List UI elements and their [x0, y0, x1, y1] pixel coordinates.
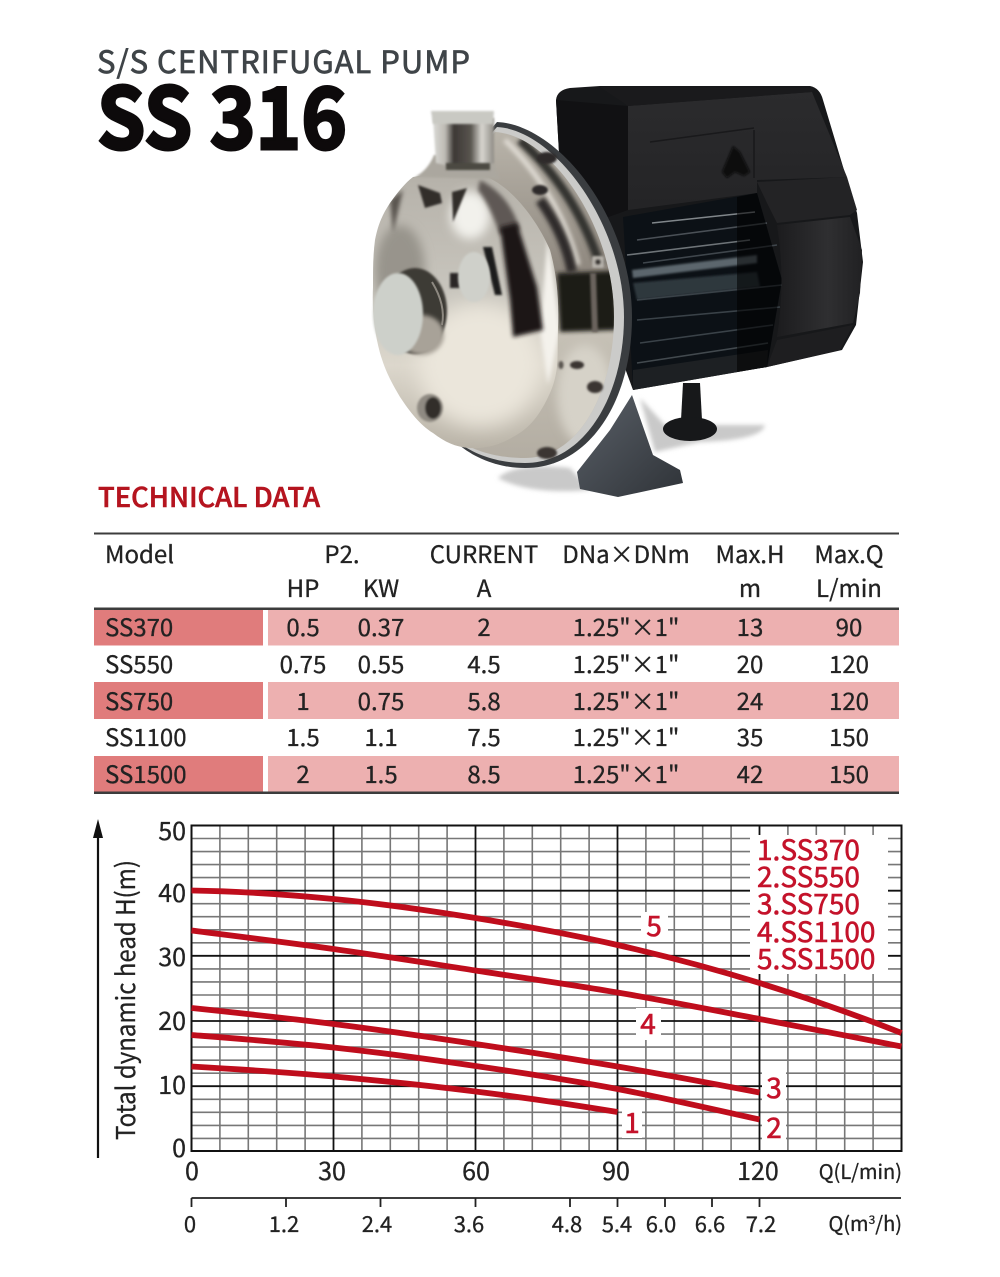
- flow axis L/min: 60: [462, 1152, 490, 1188]
- y-axis numbers: 50: [158, 812, 186, 848]
- flow axis L/min: 90: [602, 1152, 630, 1188]
- row SS1500: 1.5: [364, 755, 398, 790]
- row SS370: SS370: [105, 608, 173, 643]
- row SS370: 1.25"×1": [573, 608, 679, 643]
- y-axis arrow: [93, 819, 103, 1158]
- row SS1500: 1.25"×1": [573, 755, 679, 790]
- row SS1100: [105, 718, 869, 753]
- row SS1100: 1.25"×1": [573, 718, 679, 753]
- mounting foot: [577, 395, 683, 497]
- row SS550: 4.5: [467, 645, 501, 680]
- row SS1100: 1.5: [286, 718, 320, 753]
- curve number labels: [622, 905, 786, 1148]
- row SS370: 0.37: [358, 608, 404, 643]
- row SS750: 24: [737, 682, 763, 717]
- table rules: [94, 532, 899, 794]
- table header: CURRENT: [430, 535, 538, 570]
- flow axis m3/h: 0: [184, 1207, 196, 1239]
- curve number labels: 1: [624, 1102, 640, 1142]
- y-axis numbers: 40: [158, 874, 186, 910]
- volute casing: [373, 173, 560, 448]
- table header: Model: [105, 535, 174, 570]
- motor silhouette and terminal box: [556, 86, 863, 390]
- flow axis L/min: 0: [185, 1152, 199, 1188]
- table header: P2.: [324, 535, 360, 570]
- subtitle: S/S CENTRIFUGAL PUMP: [97, 37, 470, 82]
- y-axis numbers: [158, 812, 186, 1165]
- flow axis m3/h: 5.4: [602, 1207, 632, 1239]
- y-axis numbers: 20: [158, 1002, 186, 1038]
- row SS370: 0.5: [286, 608, 320, 643]
- motor body with cooling ribs: [623, 193, 782, 390]
- y-axis numbers: 30: [158, 938, 186, 974]
- row SS750: 1: [296, 682, 310, 717]
- curve 1: [192, 1066, 618, 1112]
- heading: technical data: TECHNICAL DATA: [98, 476, 320, 515]
- flow axis m3/h: 3.6: [454, 1207, 484, 1239]
- row SS550: 1.25"×1": [573, 645, 679, 680]
- flow axis L/min: Q(L/min): [819, 1156, 902, 1185]
- legend: 3.SS750: [757, 883, 860, 923]
- flow axis m3/h: 6.0: [646, 1207, 676, 1239]
- y-axis title: Total dynamic head H(m): [106, 860, 143, 1140]
- legend: 2.SS550: [757, 856, 860, 896]
- row SS1500: 42: [737, 755, 763, 790]
- flow axis m3/h: 6.6: [695, 1207, 725, 1239]
- table header: DNa×DNm: [562, 535, 690, 570]
- legend: 4.SS1100: [757, 911, 875, 951]
- legend: 5.SS1500: [757, 938, 875, 978]
- curve 3: [192, 1008, 760, 1092]
- flow axis m3/h: [184, 1198, 902, 1239]
- flow axis L/min: 30: [318, 1152, 346, 1188]
- table header: m: [739, 569, 761, 604]
- ground shadow: [498, 398, 765, 491]
- curve number labels: 4: [640, 1003, 656, 1043]
- row SS370: 13: [737, 608, 763, 643]
- flow axis m3/h: 1.2: [269, 1207, 299, 1239]
- pump curves: [192, 890, 902, 1120]
- row SS1500: 150: [829, 755, 869, 790]
- flow axis m3/h: 3: [869, 1211, 875, 1228]
- row SS1100: SS1100: [105, 718, 187, 753]
- row SS550: 20: [737, 645, 763, 680]
- flow axis m3/h: /h): [875, 1208, 902, 1237]
- row SS750: [94, 682, 899, 719]
- technical data table: [94, 532, 899, 794]
- table header: Max.H: [716, 535, 784, 570]
- bolts: [417, 152, 604, 459]
- row SS750: 0.75: [358, 682, 404, 717]
- flow axis m3/h: 4.8: [552, 1207, 582, 1239]
- row SS1100: 150: [829, 718, 869, 753]
- rear foot: [663, 383, 717, 441]
- curve number labels: 3: [766, 1067, 782, 1107]
- row SS750: 5.8: [467, 682, 501, 717]
- grid: [192, 826, 902, 1151]
- row SS750: 1.25"×1": [573, 682, 679, 717]
- curve 2: [192, 1035, 760, 1120]
- row SS370: [94, 608, 899, 646]
- flow axis m3/h: Q(m: [828, 1208, 869, 1237]
- performance chart: [93, 812, 902, 1239]
- legend: 1.SS370: [757, 829, 860, 869]
- y-axis numbers: 10: [158, 1066, 186, 1102]
- stainless flange: [461, 122, 632, 468]
- table header: KW: [363, 569, 399, 604]
- table header: HP: [287, 569, 319, 604]
- row SS370: 2: [477, 608, 491, 643]
- curve number labels: 5: [646, 905, 662, 945]
- row SS550: 0.55: [358, 645, 404, 680]
- row SS1500: 2: [296, 755, 310, 790]
- row SS1500: 8.5: [467, 755, 501, 790]
- table header: A: [477, 569, 492, 604]
- row SS1100: 1.1: [364, 718, 398, 753]
- title: SS 316: [97, 51, 347, 174]
- row SS1100: 7.5: [467, 718, 501, 753]
- curve 4: [192, 930, 902, 1046]
- row SS1500: [94, 755, 899, 792]
- curve number labels: 2: [766, 1107, 782, 1147]
- inlet cap: [373, 268, 447, 355]
- row SS550: 0.75: [280, 645, 326, 680]
- curve 5: [192, 890, 902, 1033]
- logo: [722, 146, 750, 178]
- table header: L/min: [816, 569, 882, 604]
- legend: [750, 829, 888, 978]
- row SS1500: SS1500: [105, 755, 187, 790]
- row SS1100: 35: [737, 718, 763, 753]
- table header: [105, 535, 884, 604]
- flow axis L/min: 120: [737, 1152, 779, 1188]
- flow axis m3/h: 2.4: [362, 1207, 392, 1239]
- pump photo illustration: [373, 86, 863, 497]
- table header: Max.Q: [814, 535, 884, 570]
- flow axis L/min: [185, 1152, 902, 1188]
- row SS550: [105, 645, 869, 680]
- row SS750: SS750: [105, 682, 173, 717]
- outlet port: [415, 111, 500, 179]
- row SS370: 90: [836, 608, 862, 643]
- fan cover: [757, 177, 862, 367]
- row SS750: 120: [829, 682, 869, 717]
- flow axis m3/h: 7.2: [746, 1207, 776, 1239]
- row SS550: SS550: [105, 645, 173, 680]
- y-axis numbers: 0: [172, 1129, 186, 1165]
- row SS550: 120: [829, 645, 869, 680]
